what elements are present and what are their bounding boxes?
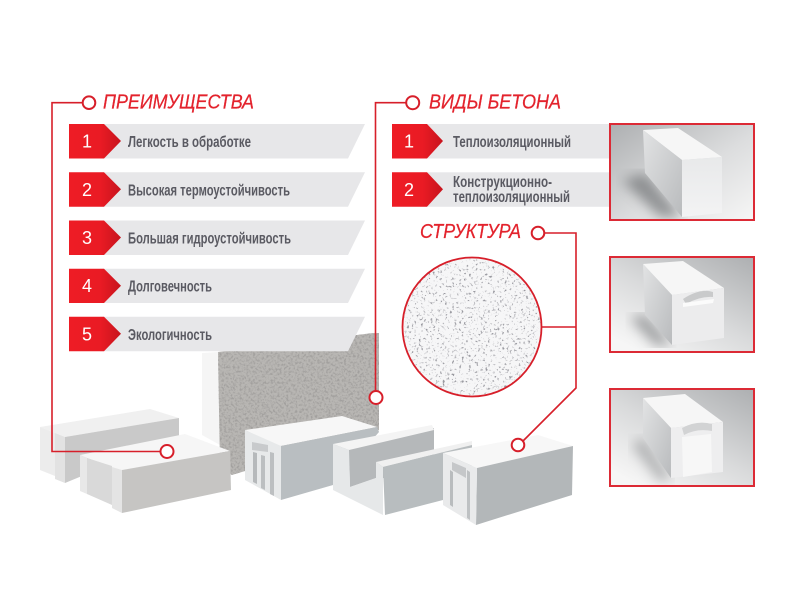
row 3: 3: [82, 228, 92, 248]
row 2: Высокая термоустойчивость: [128, 182, 290, 199]
row 4: 4: [82, 276, 92, 296]
foam block wall: [202, 330, 383, 478]
row 1: 1: [82, 132, 92, 152]
row 3: Большая гидроустойчивость: [128, 230, 291, 248]
structure texture circle: [402, 257, 542, 397]
row 5: Экологичность: [128, 327, 212, 344]
panel: concrete types list: [392, 124, 610, 207]
row 5: [69, 317, 365, 351]
row 1: [69, 124, 365, 158]
type 2: [392, 172, 610, 207]
panel: advantages list: [69, 124, 365, 351]
heading: advantages: ПРЕИМУЩЕСТВА: [103, 92, 254, 114]
type 2: 2: [404, 180, 414, 200]
row 1: Легкость в обработке: [128, 134, 251, 151]
photo: plain block: [610, 124, 754, 220]
heading: structure: СТРУКТУРА: [420, 221, 521, 243]
block: tongue and groove right: [443, 435, 573, 525]
type 2: Конструкционно-: [453, 174, 552, 191]
type 2: теплоизоляционный: [453, 189, 570, 206]
heading: concrete types: ВИДЫ БЕТОНА: [429, 92, 561, 114]
row 4: [69, 269, 365, 303]
row 2: [69, 172, 365, 207]
photo: tongue-and-groove block: [610, 389, 754, 486]
type 1: [392, 124, 610, 158]
photo: block with handle: [610, 257, 754, 352]
block: grooved centre: [245, 416, 379, 500]
connector: structure: [512, 227, 576, 451]
row 4: Долговечность: [128, 279, 212, 296]
type 1: 1: [404, 132, 414, 152]
concrete blocks group: [40, 330, 573, 525]
connector: advantages: [52, 96, 174, 458]
row 2: 2: [82, 180, 92, 200]
connector: concrete types: [370, 96, 419, 404]
block: front left: [80, 434, 231, 513]
block: U-shaped: [333, 425, 472, 515]
row 3: [69, 220, 365, 255]
type 1: Теплоизоляционный: [453, 134, 571, 151]
row 5: 5: [82, 324, 92, 344]
block: back left: [40, 409, 179, 483]
